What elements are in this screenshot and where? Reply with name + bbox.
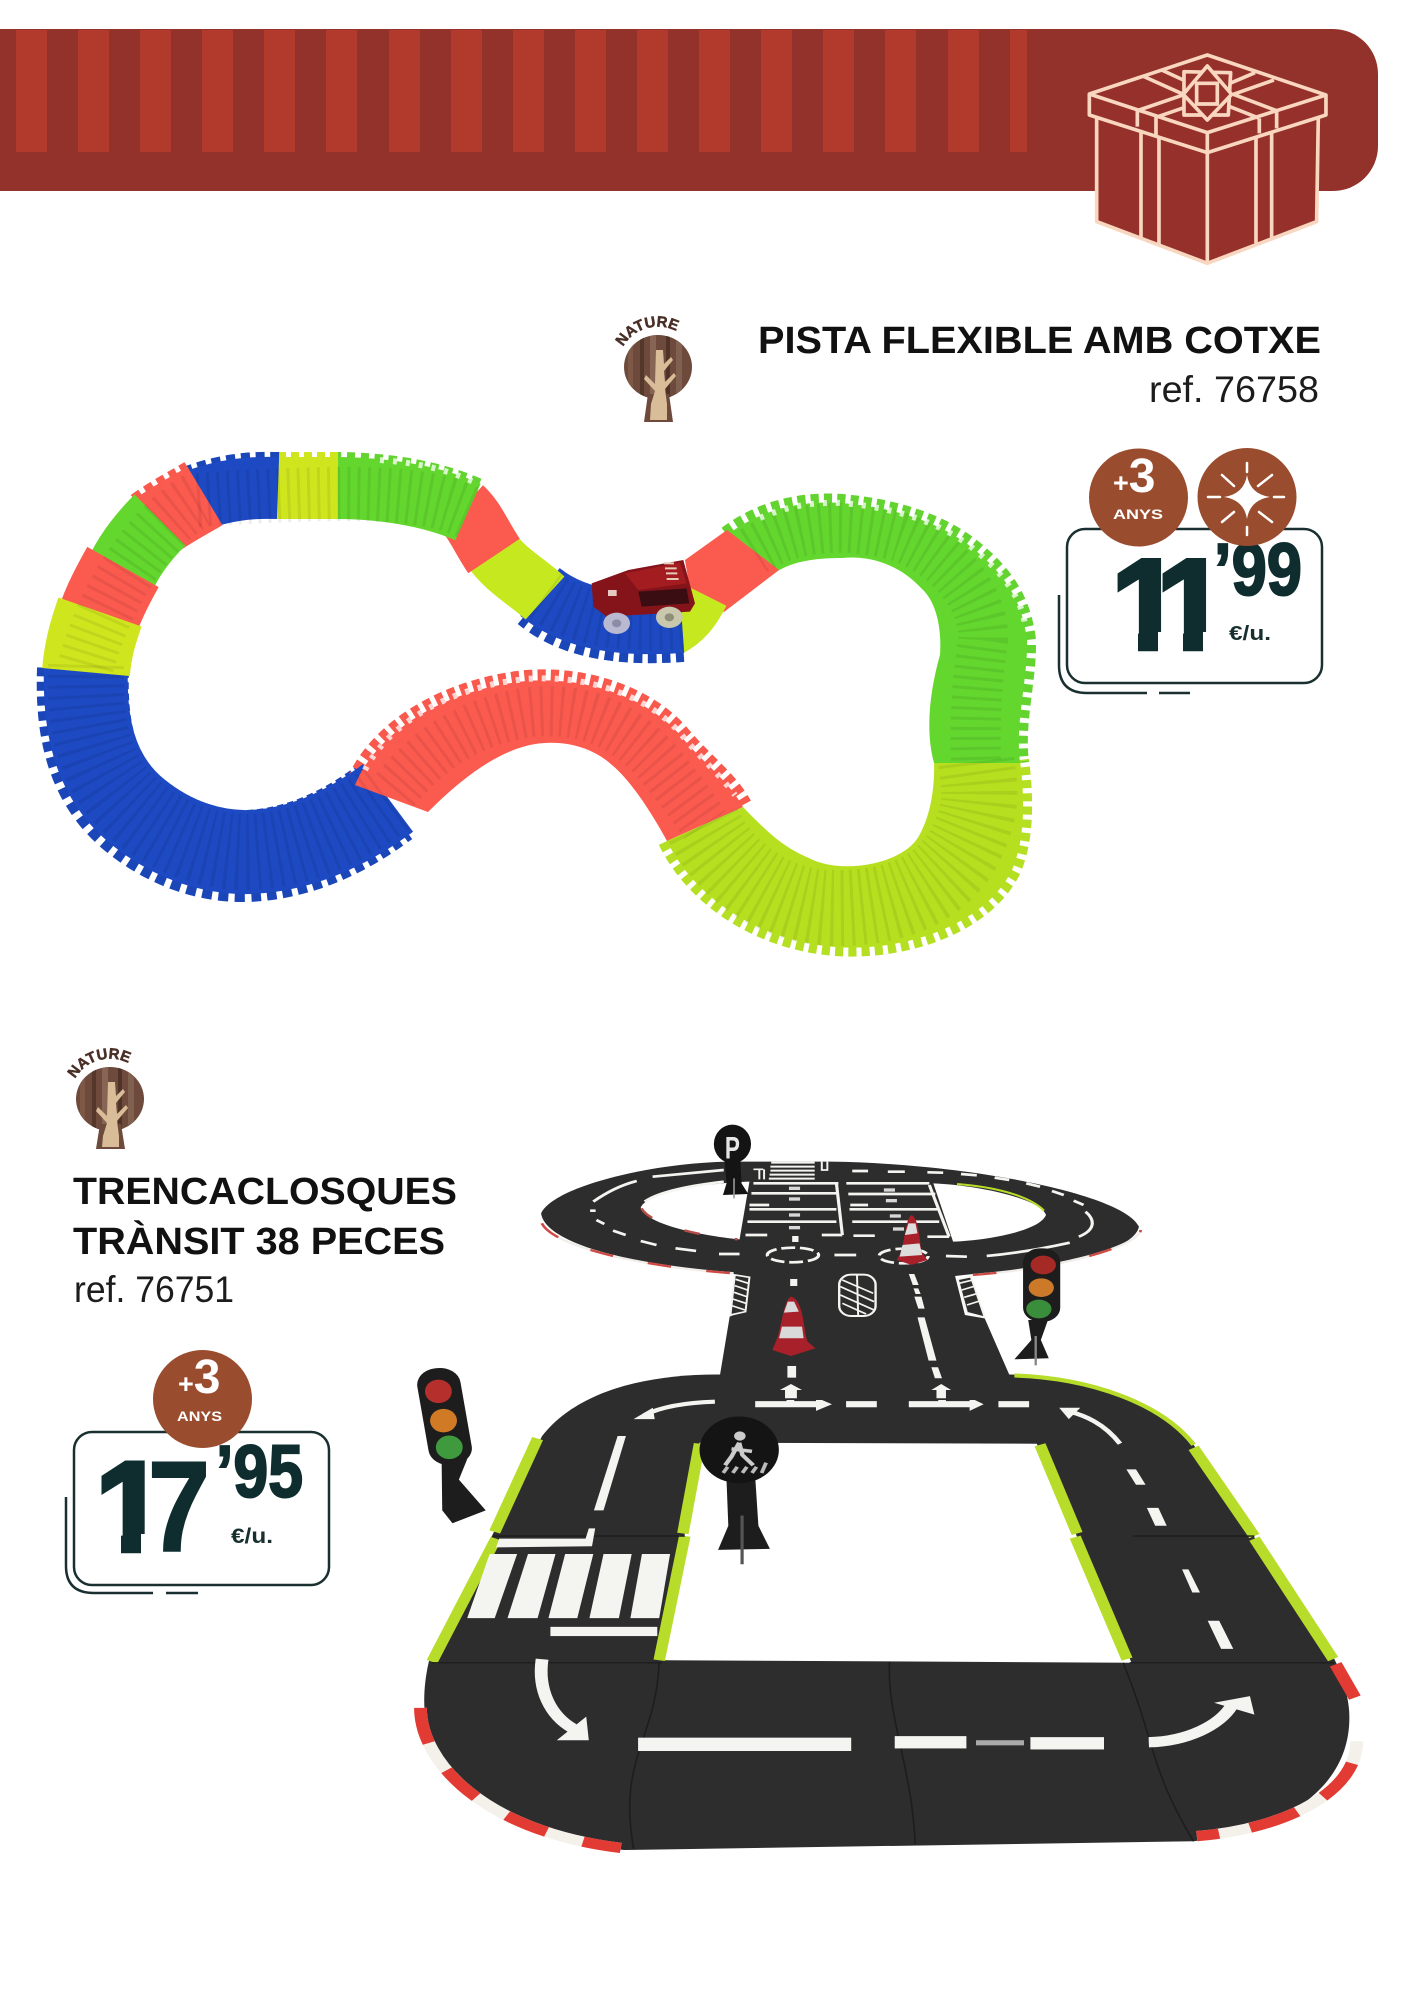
icon: nature badge bottom [66,1048,144,1149]
hatched islands [730,1275,985,1317]
price box: 11,99 [1059,528,1322,693]
text: reference 76758: ref. 76758 [1149,369,1319,410]
price box: 17,95: ’95 [216,1430,303,1513]
icon: red toy car [592,560,695,634]
icon: nature badge bottom: NATURE [66,1048,132,1078]
track edge holes [365,460,1025,795]
price box: 17,95: 1 [95,1436,166,1579]
track teeth [83,485,1027,948]
price box: 17,95 [66,1430,329,1593]
icon: cone near [772,1297,815,1356]
track surface ribs [86,494,983,908]
title: trencaclosques: TRENCACLOSQUES [73,1171,457,1213]
signs lower [415,1366,779,1564]
product: traffic puzzle road [415,1125,1357,1850]
road markings lower [467,1384,1254,1751]
road upper oval and stem [541,1125,1141,1400]
price box: 17,95: 7 [148,1436,210,1579]
badge: +3 anys: +3 [1113,450,1155,503]
track body segments [86,488,1027,948]
price box: 11,99: €/u. [1229,623,1271,645]
badge: +3 anys: ANYS [177,1408,222,1424]
road lower ring [420,1374,1357,1850]
title: trencaclosques: TRÀNSIT 38 PECES [73,1219,445,1263]
icon: parking sign [714,1125,751,1198]
icon: cone far [897,1215,927,1265]
icon: gift box [1089,55,1326,263]
product: flexible glow track [83,460,1027,948]
title: pista flexible: PISTA FLEXIBLE AMB COTXE [758,320,1321,362]
icon: traffic light left [415,1366,486,1523]
text: reference 76751: ref. 76751 [74,1269,234,1310]
icon: parking sign: P [725,1131,740,1166]
badge: +3 anys [153,1350,252,1448]
price box: 11,99: ’99 [1214,528,1302,611]
badge: +3 anys: +3 [178,1351,220,1404]
curb stripes [420,1664,1357,1848]
badge: sparkle glow [1198,448,1296,546]
icon: pedestrian sign [700,1417,779,1564]
icon: traffic light right [1014,1248,1060,1365]
badge: +3 anys: ANYS [1113,506,1163,522]
road markings upper [590,1162,1092,1263]
icon: nature badge top: NATURE [614,316,680,346]
header banner [0,29,1378,191]
price box: 17,95: €/u. [231,1525,273,1548]
badge: +3 anys [1089,448,1188,546]
icon: nature badge top [614,316,692,422]
title: trencaclosques [73,1171,457,1263]
price box: 11,99: 11 [1111,533,1228,677]
